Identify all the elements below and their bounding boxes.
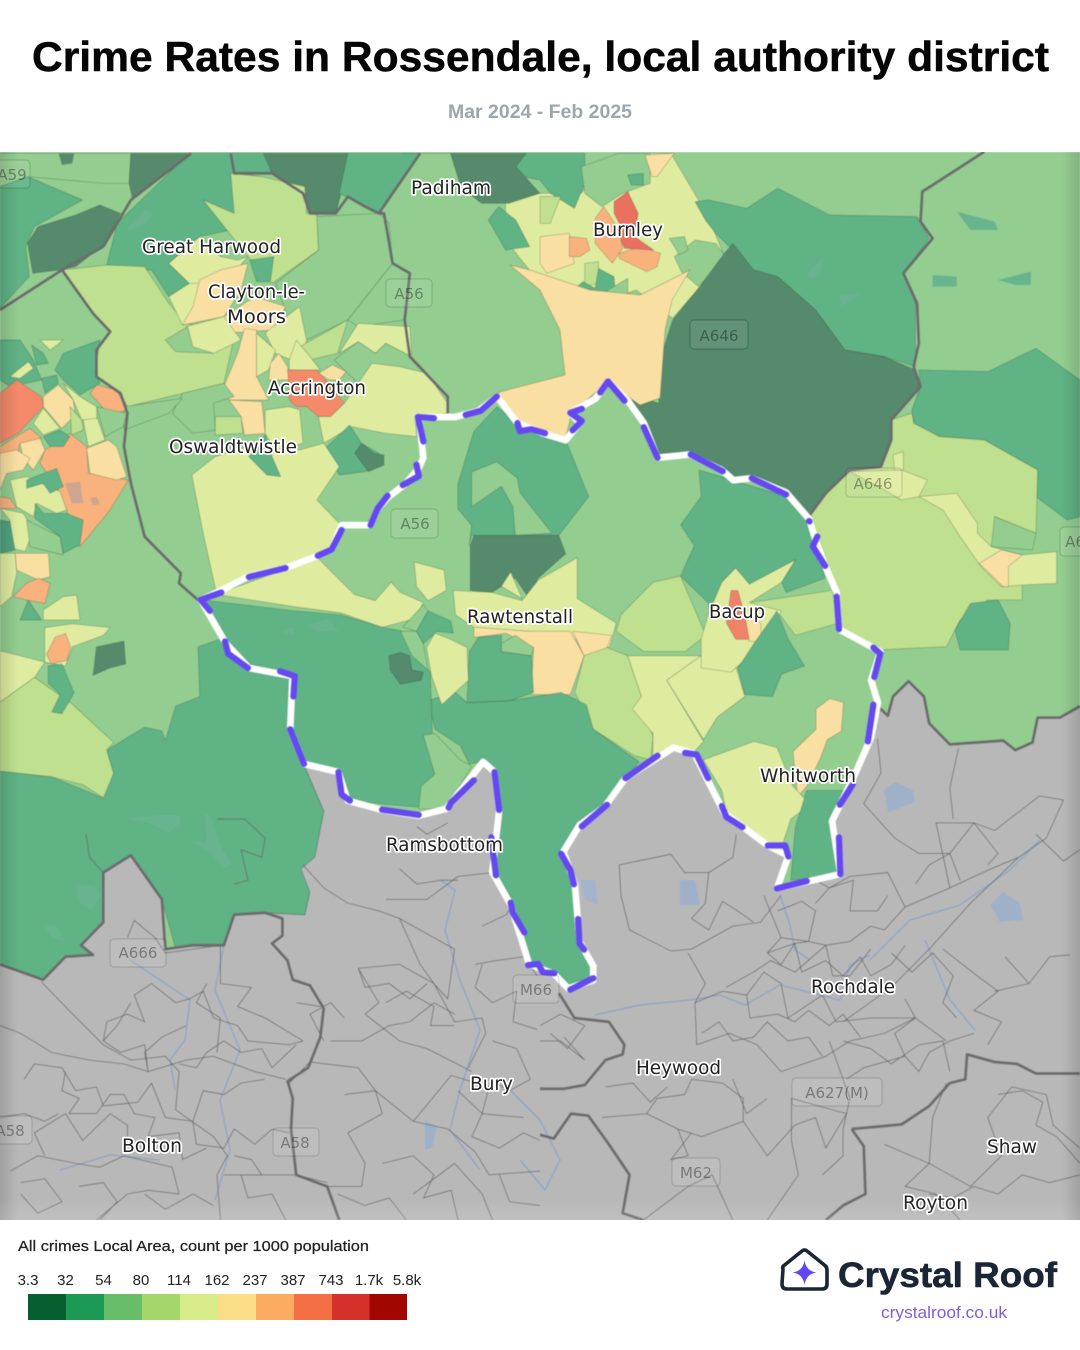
logo: Crystal Roof (782, 1250, 1057, 1322)
areas: north-east quadrant and Burnley (402, 153, 1080, 650)
town labels: Bury (470, 1073, 513, 1095)
legend scale values: 3.3 (18, 1272, 38, 1289)
road number shields: A646 (700, 327, 738, 345)
legend scale values: 32 (57, 1272, 74, 1289)
town labels: Burnley (593, 219, 663, 241)
legend scale values: 54 (95, 1272, 112, 1289)
road number shields (0, 160, 1080, 1186)
town labels: Shaw (987, 1136, 1037, 1158)
road number shields: A646 (854, 475, 892, 493)
town labels: Accrington (268, 377, 366, 399)
town labels: Ramsbottom (386, 834, 503, 856)
website link: crystalroof.co.uk (881, 1304, 1008, 1322)
legend scale values: 80 (133, 1272, 149, 1289)
areas: inside Rossendale district (201, 381, 880, 988)
legend scale values: 162 (204, 1272, 230, 1289)
legend scale values: 1.7k (355, 1272, 384, 1289)
grey area fine ward lines: west (0, 819, 540, 1220)
town labels: Bacup (709, 601, 765, 623)
town labels: Rochdale (811, 976, 895, 998)
town labels: Royton (903, 1192, 968, 1214)
legend scale values (18, 1272, 422, 1289)
outside-district grey area (0, 681, 1080, 1220)
district boundary: white line with purple dashes (201, 381, 880, 990)
logo wordmark: Crystal Roof (838, 1256, 1057, 1295)
road number shields: M66 (520, 981, 552, 999)
area: cream rural ward south of Burnley (495, 265, 690, 440)
title: Crime Rates in Rossendale, local authority district (32, 33, 1049, 80)
icon: house with star (782, 1250, 827, 1289)
panel: choropleth map (0, 152, 1080, 1220)
town labels (122, 177, 1037, 1214)
legend scale values: 387 (280, 1272, 306, 1289)
road number shields: A56 (400, 515, 430, 533)
road number shields: M62 (680, 1164, 712, 1182)
town labels: Heywood (636, 1057, 721, 1079)
legend scale values: 114 (167, 1272, 191, 1289)
areas: north-west quadrant (0, 153, 448, 630)
road number shields: A666 (119, 944, 157, 962)
legend colour swatches (28, 1294, 407, 1320)
legend scale values: 237 (242, 1272, 268, 1289)
map surface: areas, grey region and boundary (0, 152, 1080, 1220)
legend heading: All crimes Local Area, count per 1000 population (18, 1238, 369, 1255)
town labels: Great Harwood (142, 236, 281, 258)
legend scale values: 743 (318, 1272, 344, 1289)
grey area fine ward lines: east (540, 739, 1080, 1220)
road number shields: A56 (394, 285, 424, 303)
subtitle: date range: Mar 2024 - Feb 2025 (448, 102, 632, 123)
town labels: Padiham (411, 177, 491, 199)
town labels: Moors (227, 306, 286, 328)
town labels: Oswaldtwistle (169, 436, 297, 458)
town labels: Clayton-le- (208, 281, 305, 303)
areas: west town cluster (0, 340, 128, 620)
town labels: Rawtenstall (467, 606, 573, 628)
town labels: Bolton (122, 1135, 182, 1157)
county border lines (0, 152, 1080, 1220)
grey area water features (60, 782, 1040, 1200)
town labels: Whitworth (760, 765, 856, 787)
road number shields: A58 (280, 1134, 310, 1152)
areas: south-west quadrant (0, 624, 324, 980)
legend scale values: 5.8k (393, 1272, 422, 1289)
road number shields: A627(M) (805, 1084, 869, 1102)
legend (18, 1238, 422, 1320)
